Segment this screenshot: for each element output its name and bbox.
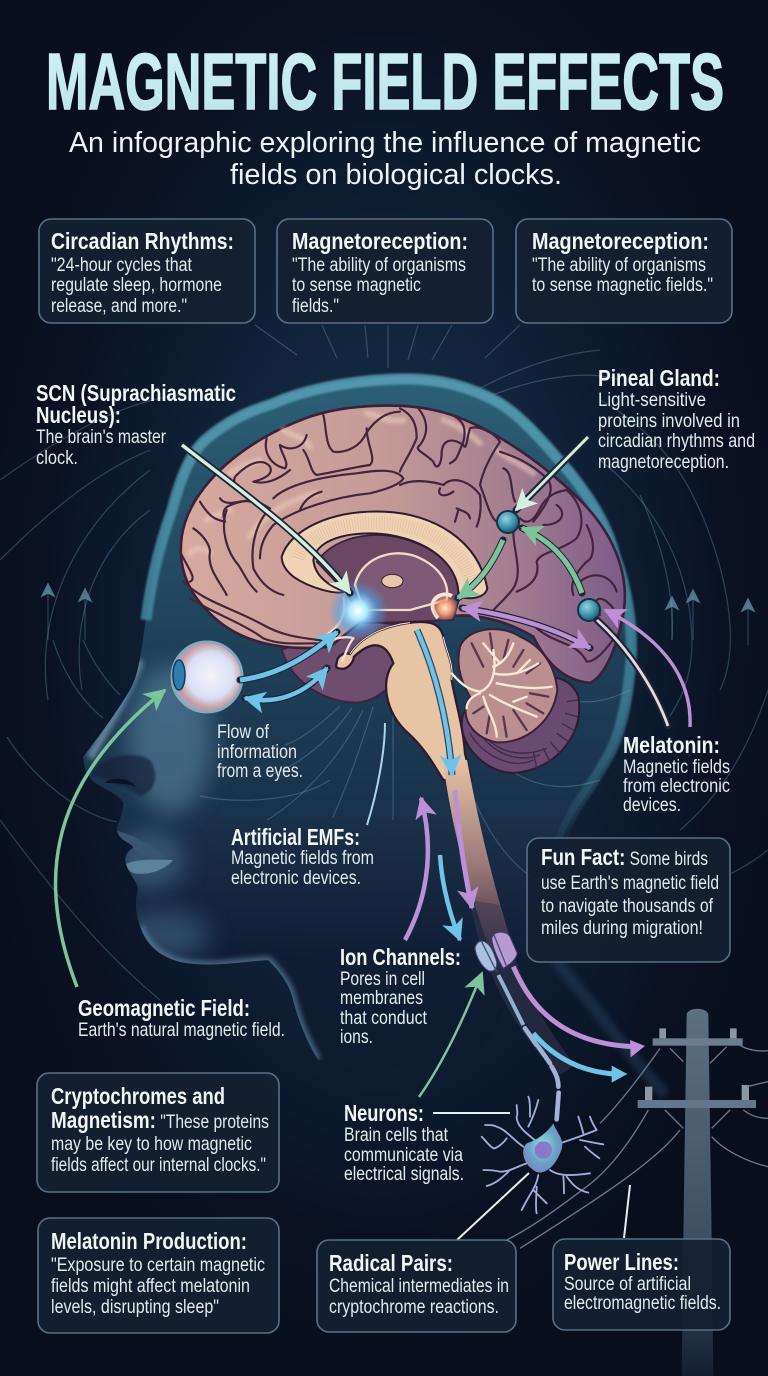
arrow: geomagnetic	[56, 690, 165, 987]
label: SCN: The brain's master	[36, 427, 167, 448]
arrow: blue down brain stem	[417, 630, 452, 775]
eye	[172, 642, 242, 712]
label: melatonin: devices.	[623, 795, 681, 816]
label: ion channels: that conduct	[340, 1008, 428, 1029]
lower cross arm	[638, 1100, 756, 1108]
panel: fun fact: to navigate thousands of	[541, 896, 714, 917]
cerebral cortex	[181, 406, 625, 683]
panel: circadian rhythms: release, and more."	[51, 296, 187, 317]
label: pineal gland: Light-sensitive	[598, 390, 706, 411]
panel: radical pairs: Chemical intermediates in	[329, 1276, 509, 1297]
panel: circadian rhythms: "24-hour cycles that	[51, 255, 193, 276]
panel: cryptochromes and magnetism	[37, 1073, 279, 1192]
label: SCN: SCN (Suprachiasmatic	[36, 380, 236, 406]
arrow: green lower node to pineal	[522, 528, 582, 593]
node: lower melatonin	[578, 599, 600, 621]
panel: melatonin production: fields might affect melatonin	[51, 1276, 250, 1297]
arrowhead: blue	[612, 1066, 627, 1083]
label: ion channels	[340, 944, 461, 1048]
lower right illustration	[475, 932, 768, 1376]
panel: fun fact: Fun Fact: Some birds	[541, 844, 708, 870]
cerebellum	[452, 629, 557, 742]
panel: magnetoreception duplicate	[516, 219, 732, 323]
label: ion channels: Ion Channels:	[340, 944, 461, 970]
label: ion channels: membranes	[340, 988, 423, 1009]
label: flow of information: from a eyes.	[217, 761, 303, 782]
magnetic field lines	[0, 325, 768, 1000]
panel: magnetoreception: fields."	[292, 296, 339, 317]
wires	[507, 1040, 768, 1248]
neuron	[482, 1097, 603, 1213]
panel: magnetoreception duplicate: "The ability of organisms	[532, 255, 706, 276]
arrow: eye double	[245, 668, 327, 700]
cortical highlights	[190, 413, 533, 553]
label: neurons: Brain cells that	[344, 1125, 449, 1146]
power pole	[507, 1009, 768, 1376]
panel: circadian rhythms	[39, 219, 255, 323]
cerebellum ribbed lobe	[462, 677, 579, 773]
panel: radical pairs: cryptochrome reactions.	[329, 1297, 499, 1318]
shoulder glow	[555, 960, 665, 1095]
panel: cryptochromes and magnetism: fields affect our internal clocks."	[51, 1155, 266, 1176]
label: melatonin: Magnetic fields	[623, 757, 730, 778]
label: SCN: clock.	[36, 448, 78, 469]
label: artificial EMFs: Artificial EMFs:	[231, 824, 360, 850]
panel: melatonin production: "Exposure to certain magnetic	[51, 1255, 265, 1276]
panel: melatonin production: levels, disrupting sleep"	[51, 1297, 219, 1318]
subtitle: An infographic exploring the influence of magnetic	[69, 127, 701, 159]
panel: magnetoreception duplicate: Magnetoreception:	[532, 228, 709, 254]
nostril	[105, 779, 136, 787]
brain stem	[336, 622, 472, 780]
panel: radical pairs	[317, 1240, 516, 1332]
panel: fun fact: use Earth's magnetic field	[541, 873, 719, 894]
upper cross arm	[653, 1038, 743, 1046]
parietal folds	[400, 408, 617, 662]
label: neurons: communicate via	[344, 1145, 463, 1166]
axon to neuron	[498, 975, 559, 1119]
panel: cryptochromes and magnetism: Magnetism: "These proteins	[51, 1107, 269, 1133]
label: melatonin: Melatonin:	[623, 732, 720, 758]
arrowhead: purple	[630, 1040, 645, 1057]
label: neurons: Neurons:	[344, 1100, 424, 1126]
label: SCN: Nucleus):	[36, 402, 121, 428]
label: geomagnetic field: Geomagnetic Field:	[78, 995, 250, 1021]
arrow: blue to pole	[533, 1033, 615, 1074]
panel: magnetoreception: to sense magnetic	[292, 275, 421, 296]
arrow: melatonin pointer	[597, 620, 668, 726]
panel: cryptochromes and magnetism: Cryptochromes and	[51, 1083, 225, 1109]
arrow: pineal pointer	[516, 437, 588, 510]
label: flow of information: information	[217, 742, 297, 763]
label: neurons: electrical signals.	[344, 1164, 464, 1185]
label: pineal gland	[598, 365, 755, 473]
subtitle: fields on biological clocks.	[230, 159, 562, 191]
lower limbic lobe	[282, 620, 423, 703]
nose wing	[90, 755, 155, 796]
label: pineal gland: Pineal Gland:	[598, 365, 720, 391]
panel: magnetoreception	[277, 219, 493, 323]
panel: fun fact	[527, 838, 730, 962]
arrow: purple double	[462, 608, 590, 648]
panel: power lines	[553, 1239, 730, 1330]
label: flow of information: Flow of	[217, 722, 270, 743]
subtitle	[69, 127, 701, 191]
arrow: green pineal to centre	[458, 540, 503, 598]
corpus callosum	[282, 512, 487, 598]
arrow: SCN pointer	[182, 445, 350, 593]
spinal cord	[443, 760, 575, 1075]
face shading	[90, 660, 318, 1060]
label: geomagnetic field	[78, 995, 285, 1041]
ion channel	[475, 932, 517, 972]
glow: pineal spot	[432, 594, 458, 621]
panel: magnetoreception: Magnetoreception:	[292, 228, 468, 254]
panel: cryptochromes and magnetism: may be key to how magnetic	[51, 1134, 252, 1155]
label: artificial EMFs	[231, 824, 374, 889]
lower lip	[126, 860, 173, 874]
panel: magnetoreception: "The ability of organisms	[292, 255, 466, 276]
label: geomagnetic field: Earth's natural magnetic field.	[78, 1020, 285, 1041]
lower field lines under the brain	[200, 690, 630, 890]
panel: fun fact: miles during migration!	[541, 918, 703, 939]
arrow: green to ion channel	[419, 973, 482, 1097]
label: pineal gland: magnetoreception.	[598, 452, 729, 473]
inner dark ventricle region	[317, 535, 459, 623]
panel: radical pairs: Radical Pairs:	[329, 1250, 453, 1276]
label: ion channels: ions.	[340, 1027, 373, 1048]
pointer: power lines	[624, 1185, 630, 1238]
head silhouette	[83, 377, 633, 1075]
rim glow	[146, 379, 631, 852]
brain	[180, 406, 625, 780]
label: artificial EMFs: electronic devices.	[231, 868, 361, 889]
arrow: purple to lower node	[605, 610, 690, 727]
arrow: purple to pole	[513, 967, 633, 1047]
pointer: artificial EMFs	[367, 723, 385, 825]
thalamus	[355, 553, 447, 610]
label: flow of information	[217, 722, 303, 782]
pointer: radical pairs	[457, 1173, 529, 1240]
arrow: blue to ion channel	[440, 855, 460, 940]
node: upper pineal	[497, 511, 519, 533]
label: melatonin	[623, 732, 730, 816]
arrow: purple down spine	[455, 790, 472, 908]
label: neurons	[344, 1100, 464, 1185]
insulators	[645, 1028, 749, 1100]
pointer: neurons	[433, 1112, 510, 1114]
upper lip	[117, 831, 145, 848]
frontal folds	[180, 412, 403, 644]
panel: circadian rhythms: Circadian Rhythms:	[51, 228, 234, 254]
glow: SCN	[328, 581, 388, 641]
panel: melatonin production	[38, 1218, 279, 1333]
panel: melatonin production: Melatonin Production:	[51, 1228, 247, 1254]
panel: power lines: electromagnetic fields.	[564, 1293, 721, 1314]
panel: circadian rhythms: regulate sleep, hormone	[51, 275, 222, 296]
label: ion channels: Pores in cell	[340, 969, 425, 990]
label: artificial EMFs: Magnetic fields from	[231, 848, 374, 869]
panel: magnetoreception duplicate: to sense magnetic fields."	[532, 275, 713, 296]
label: SCN	[36, 380, 236, 469]
panel: power lines: Power Lines:	[564, 1249, 679, 1275]
arrow: purple up	[405, 798, 428, 940]
panel: power lines: Source of artificial	[564, 1274, 691, 1295]
optic chiasm detail	[323, 597, 353, 662]
arrow: eye to SCN	[240, 632, 337, 680]
label: melatonin: from electronic	[623, 776, 730, 797]
label: pineal gland: proteins involved in	[598, 411, 740, 432]
